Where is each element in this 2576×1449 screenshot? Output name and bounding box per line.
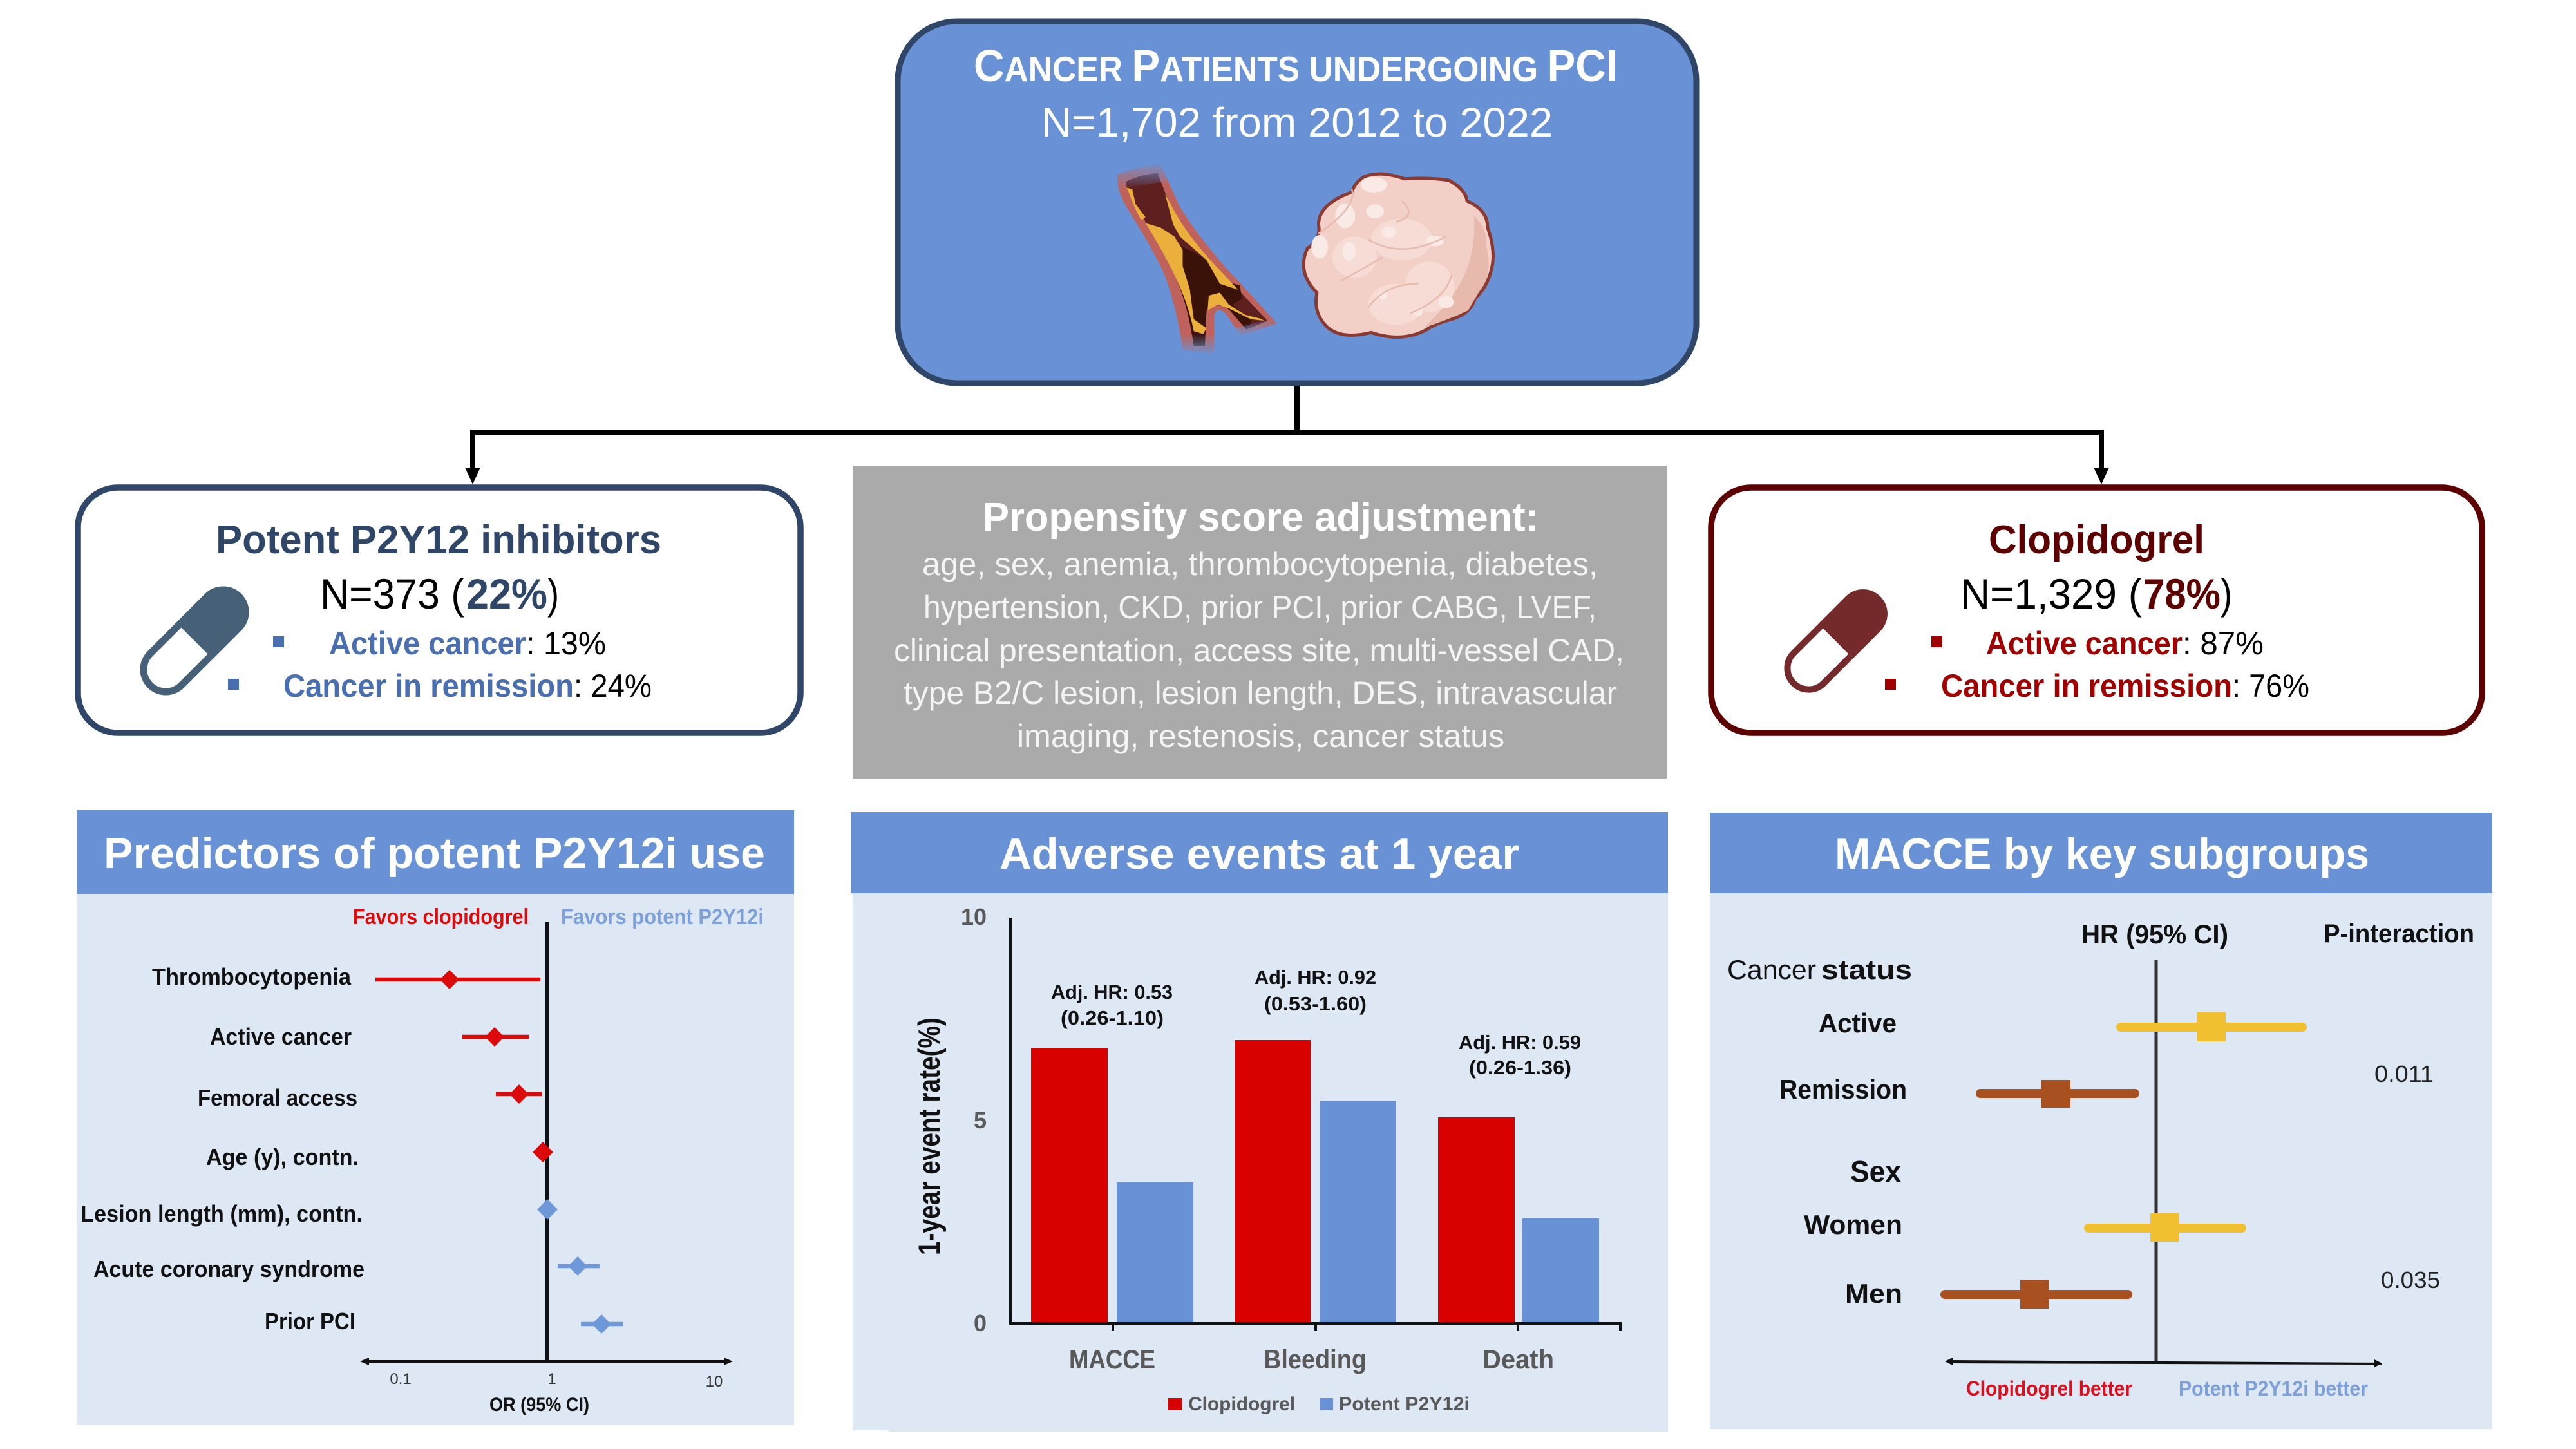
annotation: MACCE hazard ratio: (0.26-1.10) bbox=[1061, 1007, 1164, 1029]
list item: active cancer 87%: Active cancer bbox=[1986, 625, 2183, 661]
icon: tumor bbox=[1303, 174, 1493, 337]
row labels: predictors: Lesion length (mm), contn. bbox=[80, 1200, 363, 1227]
stat: N=1,329 (78%) bbox=[1960, 570, 2232, 618]
list item: active cancer 87% bbox=[1931, 625, 2264, 661]
category labels: Bleeding bbox=[1264, 1344, 1367, 1374]
heading: MACCE by key subgroups: MACCE by key subgroups bbox=[1835, 829, 2369, 878]
column header: HR: HR (95% CI) bbox=[2081, 919, 2228, 949]
axis tick labels: 1 bbox=[547, 1370, 556, 1388]
heading: potent P2Y12 inhibitors: Potent P2Y12 inhibitors bbox=[216, 518, 661, 562]
stat: N=1,329 (78%): ) bbox=[2221, 570, 2232, 618]
annotation: bleeding hazard ratio bbox=[1255, 966, 1376, 1015]
annotation: MACCE hazard ratio: Adj. HR: 0.53 bbox=[1051, 981, 1173, 1003]
stat: N=1,329 (78%): 78% bbox=[2143, 570, 2221, 618]
annotation: MACCE hazard ratio bbox=[1051, 981, 1173, 1029]
row labels: subgroups: status bbox=[1821, 954, 1912, 985]
row labels: subgroups: Active bbox=[1819, 1008, 1897, 1038]
label: favors potent P2Y12i: Favors potent P2Y12i bbox=[561, 905, 764, 929]
subtitle: sample size: N=1,702 from 2012 to 2022 bbox=[1041, 99, 1553, 146]
annotation: bleeding hazard ratio: Adj. HR: 0.92 bbox=[1255, 966, 1376, 989]
heading: propensity score adjustment: Propensity score adjustment: bbox=[983, 495, 1539, 540]
panel: adverse events at 1 year bbox=[851, 812, 1668, 1432]
row labels: subgroups: Women bbox=[1804, 1209, 1902, 1240]
stat: N=373 (22%) bbox=[320, 570, 559, 618]
list item: cancer in remission 24%: Cancer in remission bbox=[283, 668, 574, 704]
panel: propensity score adjustment bbox=[853, 466, 1667, 779]
list item: active cancer 87%: : 87% bbox=[2183, 625, 2264, 661]
stat: N=373 (22%): N=373 ( bbox=[320, 570, 464, 618]
stat: N=1,329 (78%): N=1,329 ( bbox=[1960, 570, 2142, 618]
row labels: subgroups: Cancer bbox=[1727, 954, 1816, 985]
axis tick labels: 0.1 bbox=[390, 1370, 412, 1388]
stat: N=373 (22%): ) bbox=[547, 570, 559, 618]
icon: capsule red bbox=[1776, 579, 1898, 701]
row labels: subgroups bbox=[1727, 954, 1912, 1309]
list item: active cancer 13%: : 13% bbox=[526, 625, 606, 661]
category labels: Death bbox=[1482, 1344, 1554, 1374]
row labels: subgroups: Sex bbox=[1850, 1155, 1901, 1188]
annotation: death hazard ratio bbox=[1459, 1031, 1581, 1079]
icon: artery with plaque bbox=[1113, 160, 1282, 356]
heading: clopidogrel: Clopidogrel bbox=[1989, 518, 2204, 562]
icon: capsule blue bbox=[132, 576, 260, 703]
list item: cancer in remission 76%: Cancer in remission bbox=[1941, 668, 2232, 704]
row labels: predictors: Acute coronary syndrome bbox=[93, 1256, 365, 1282]
list item: cancer in remission 24%: : 24% bbox=[574, 668, 652, 704]
axis tick labels bbox=[390, 1370, 723, 1390]
panel: potent P2Y12 inhibitors bbox=[78, 488, 800, 733]
stat: N=373 (22%): 22% bbox=[466, 570, 547, 618]
legend: Potent P2Y12i bbox=[1339, 1394, 1470, 1415]
p-values: 0.011 bbox=[2374, 1061, 2434, 1087]
annotation: bleeding hazard ratio: (0.53-1.60) bbox=[1264, 992, 1367, 1015]
row labels: predictors bbox=[80, 963, 365, 1334]
legend: Clopidogrel bbox=[1188, 1394, 1295, 1415]
text block: adjustment covariates: imaging, restenosis, cancer status bbox=[1017, 718, 1504, 754]
row labels: predictors: Age (y), contn. bbox=[206, 1144, 359, 1170]
text block: adjustment covariates: type B2/C lesion, lesion length, DES, intravascular bbox=[904, 675, 1617, 711]
row labels: predictors: Active cancer bbox=[210, 1023, 352, 1050]
axis tick labels: 10 bbox=[706, 1373, 723, 1390]
p-values bbox=[2374, 1061, 2440, 1293]
label: favors clopidogrel: Favors clopidogrel bbox=[353, 905, 529, 929]
bar chart: 1-year event rates bbox=[1009, 918, 1622, 1331]
column header: P-interaction: P-interaction bbox=[2324, 920, 2474, 948]
row labels: subgroups: Remission bbox=[1779, 1074, 1907, 1104]
list item: active cancer 13% bbox=[273, 625, 606, 661]
list item: active cancer 13%: Active cancer bbox=[329, 625, 526, 661]
label: clopidogrel better: Clopidogrel better bbox=[1966, 1377, 2132, 1400]
y axis title: 1-year event rate(%) bbox=[912, 1018, 946, 1255]
text block: adjustment covariates: hypertension, CKD, prior PCI, prior CABG, LVEF, bbox=[923, 589, 1596, 625]
legend bbox=[1168, 1394, 1470, 1415]
annotation: death hazard ratio: (0.26-1.36) bbox=[1469, 1056, 1571, 1079]
y axis tick labels: 5 bbox=[974, 1107, 987, 1133]
category labels bbox=[1069, 1344, 1554, 1374]
note: plaque deposits bbox=[1127, 187, 1264, 334]
title: cancer patients undergoing PCI: CANCER PATIENTS UNDERGOING PCI bbox=[974, 41, 1618, 91]
panel: clopidogrel bbox=[1711, 488, 2482, 733]
y axis tick labels: 10 bbox=[961, 904, 987, 930]
p-values: 0.035 bbox=[2381, 1267, 2440, 1293]
annotation: death hazard ratio: Adj. HR: 0.59 bbox=[1459, 1031, 1581, 1054]
axis title: OR (95% CI): OR (95% CI) bbox=[489, 1394, 589, 1416]
category labels: MACCE bbox=[1069, 1344, 1155, 1374]
forest plot: subgroups bbox=[1945, 960, 2382, 1367]
y axis tick labels bbox=[961, 904, 987, 1336]
row labels: predictors: Femoral access bbox=[198, 1084, 357, 1111]
row labels: predictors: Prior PCI bbox=[265, 1308, 355, 1334]
panel: predictors of potent P2Y12i use bbox=[77, 810, 794, 1425]
connector: top box to both treatment arms bbox=[465, 384, 2109, 484]
row labels: subgroups: Men bbox=[1845, 1278, 1902, 1309]
list item: cancer in remission 76%: : 76% bbox=[2232, 668, 2309, 704]
panel: MACCE by key subgroups bbox=[1710, 813, 2492, 1429]
heading: predictors: Predictors of potent P2Y12i use bbox=[104, 829, 765, 878]
label: potent P2Y12i better: Potent P2Y12i better bbox=[2179, 1377, 2368, 1400]
y axis tick labels: 0 bbox=[974, 1310, 987, 1336]
heading: adverse events: Adverse events at 1 year bbox=[999, 829, 1519, 878]
text block: adjustment covariates bbox=[894, 546, 1624, 754]
row labels: predictors: Thrombocytopenia bbox=[152, 963, 352, 990]
text block: adjustment covariates: clinical presentation, access site, multi-vessel CAD, bbox=[894, 632, 1624, 668]
forest plot: odds ratios bbox=[360, 922, 733, 1365]
text block: adjustment covariates: age, sex, anemia, thrombocytopenia, diabetes, bbox=[922, 546, 1598, 582]
panel: study population bbox=[898, 21, 1696, 383]
